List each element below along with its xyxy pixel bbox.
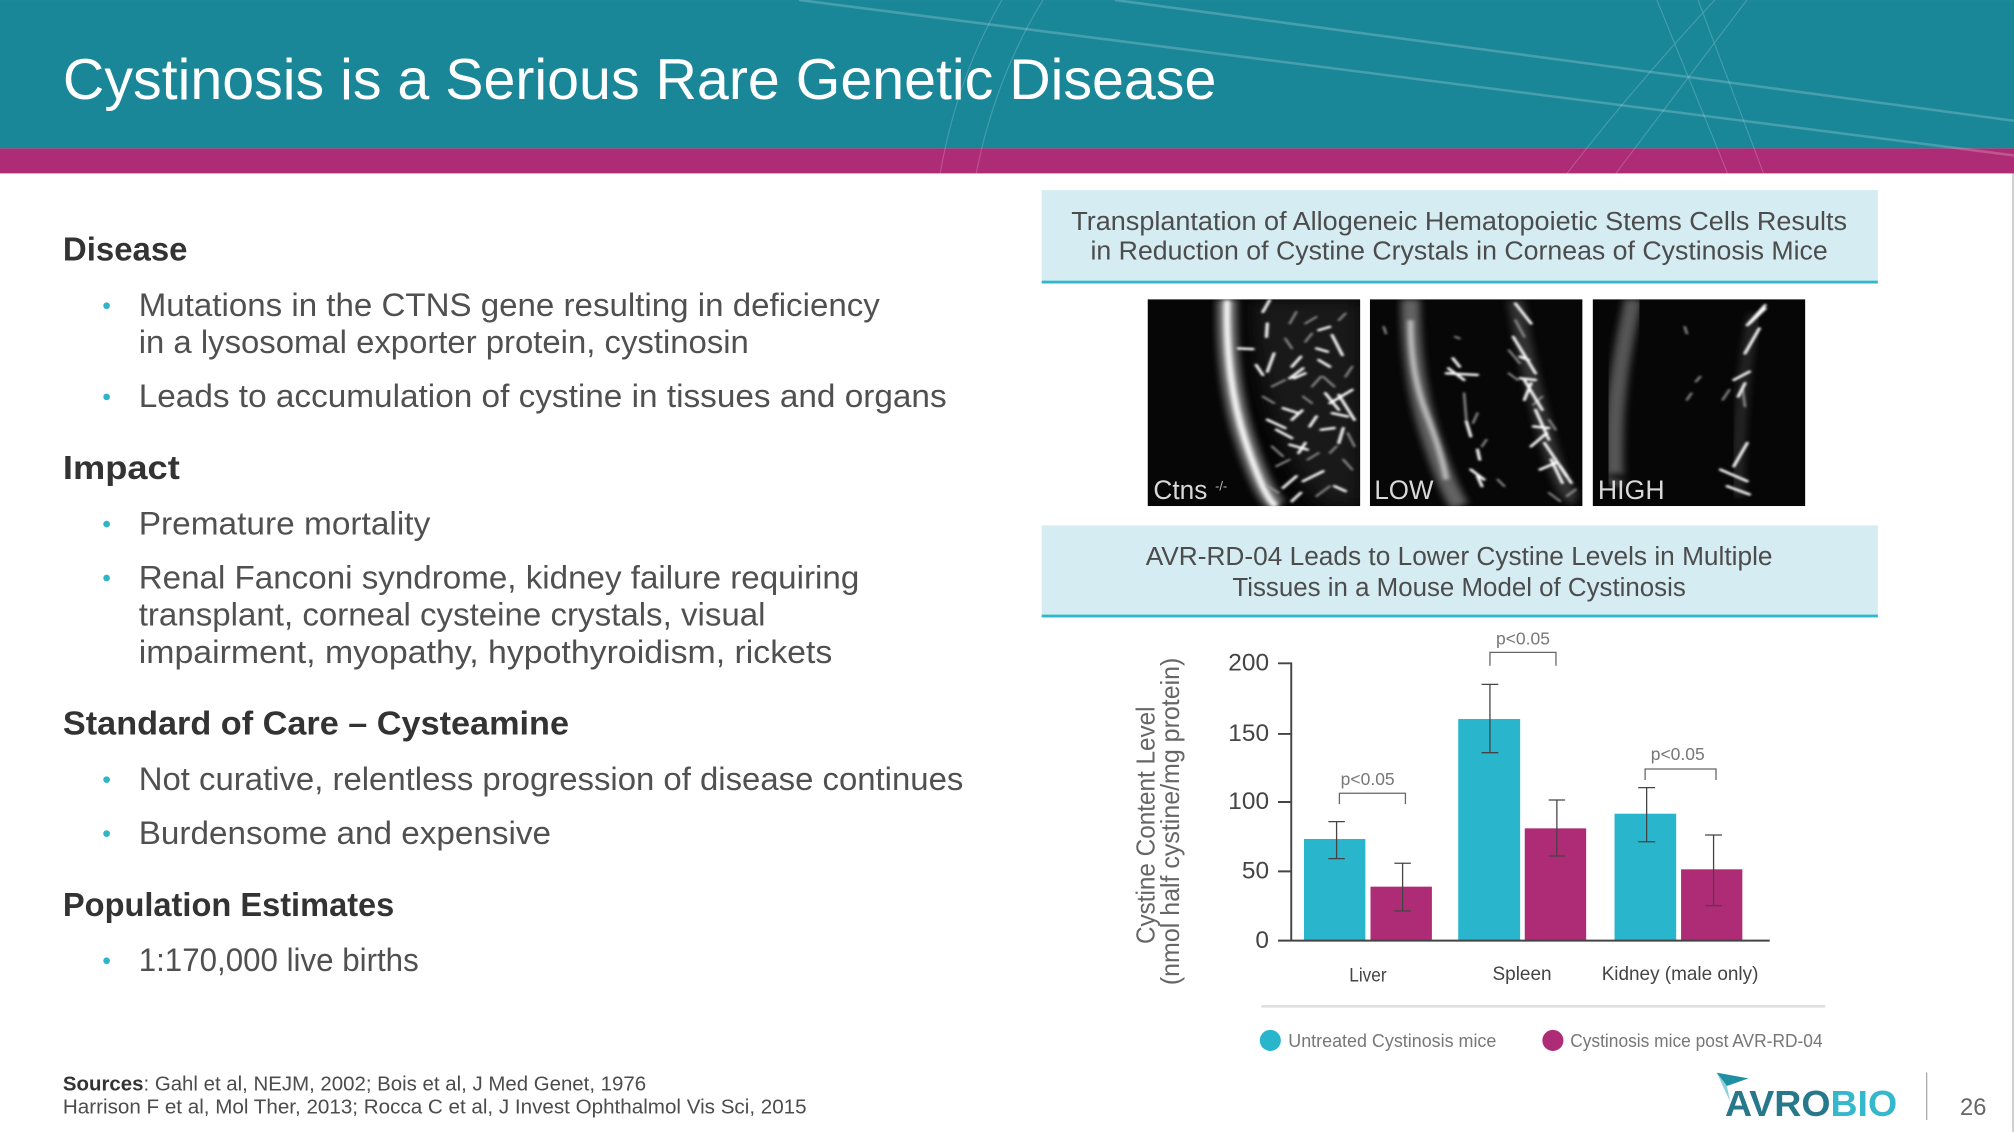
y-axis tick labels: 200 bbox=[1228, 649, 1269, 676]
y-axis tick labels: 0 bbox=[1255, 927, 1269, 954]
bullets: standard of care: Burdensome and expensive bbox=[139, 815, 551, 851]
heading: disease: Disease bbox=[63, 232, 188, 269]
y-axis tick labels: 150 bbox=[1228, 720, 1269, 747]
bullets: impact: transplant, corneal cysteine crystals, visual bbox=[139, 597, 766, 633]
y-axis title bbox=[1133, 658, 1185, 985]
header banner bbox=[0, 0, 2014, 173]
panel: left text column bbox=[63, 232, 963, 978]
panel: transplantation heading box bbox=[1042, 190, 1878, 283]
y-axis title: (nmol half cystine/mg protein) bbox=[1157, 658, 1185, 985]
y-axis tick labels: 100 bbox=[1228, 788, 1269, 815]
heading: population estimates: Population Estimates bbox=[63, 887, 394, 924]
category labels: Liver bbox=[1349, 965, 1387, 986]
category labels bbox=[1349, 964, 1758, 986]
category labels: Kidney (male only) bbox=[1602, 964, 1758, 985]
micrograph: LOW: LOW bbox=[1374, 475, 1434, 505]
sources: Harrison F et al, Mol Ther, 2013; Rocca C et al, J Invest Ophthalmol Vis Sci, 2015 bbox=[63, 1097, 807, 1119]
bullets: impact: Renal Fanconi syndrome, kidney failure requiring bbox=[139, 559, 859, 595]
micrograph: Ctns -/-: Ctns bbox=[1153, 475, 1207, 505]
category labels: Spleen bbox=[1493, 964, 1552, 985]
title: Cystinosis is a Serious Rare Genetic Disease bbox=[63, 48, 1216, 112]
panel: AVR-RD-04 heading box: Tissues in a Mouse Model of Cystinosis bbox=[1232, 572, 1686, 602]
legend bbox=[1260, 1005, 1825, 1051]
bullets: disease: in a lysosomal exporter protein, cystinosin bbox=[139, 324, 749, 360]
bullets: impact: impairment, myopathy, hypothyroidism, rickets bbox=[139, 634, 832, 670]
micrograph: HIGH bbox=[1593, 299, 1805, 506]
significance labels: p<0.05 bbox=[1496, 628, 1550, 648]
significance labels: p<0.05 bbox=[1341, 769, 1395, 789]
micrograph: Ctns -/- bbox=[1148, 299, 1361, 507]
micrograph: LOW bbox=[1370, 299, 1582, 506]
y-axis tick labels: 50 bbox=[1242, 858, 1269, 885]
micrograph: Ctns -/-: -/- bbox=[1215, 479, 1227, 494]
significance brackets bbox=[1339, 652, 1716, 804]
sources: Sources: Gahl et al, NEJM, 2002; Bois et al, J Med Genet, 1976 bbox=[63, 1074, 646, 1096]
bullets: standard of care bbox=[103, 761, 963, 851]
bars: Liver bbox=[1304, 839, 1432, 941]
panel: AVR-RD-04 heading box bbox=[1042, 525, 1878, 617]
bullets: disease: Leads to accumulation of cystine in tissues and organs bbox=[139, 378, 947, 414]
bullets: impact: Premature mortality bbox=[139, 505, 430, 541]
page number: 26 bbox=[1960, 1094, 1986, 1121]
y-axis title: Cystine Content Level bbox=[1133, 706, 1161, 944]
footer divider bbox=[1926, 1073, 1927, 1120]
y-axis tick labels bbox=[1228, 649, 1269, 954]
bars: Spleen bbox=[1458, 719, 1586, 941]
significance labels: p<0.05 bbox=[1651, 744, 1705, 764]
heading: standard of care: Standard of Care – Cysteamine bbox=[63, 706, 569, 743]
heading: impact: Impact bbox=[63, 450, 180, 487]
legend: Untreated Cystinosis mice bbox=[1288, 1030, 1496, 1051]
bullets: population estimates: 1:170,000 live births bbox=[139, 942, 419, 978]
axes bbox=[1278, 663, 1770, 941]
bullets: disease: Mutations in the CTNS gene resulting in deficiency bbox=[139, 287, 880, 323]
bullets: impact bbox=[103, 505, 859, 670]
panel: AVR-RD-04 heading box: AVR-RD-04 Leads to Lower Cystine Levels in Multiple bbox=[1146, 541, 1773, 571]
bullets: standard of care: Not curative, relentless progression of disease continues bbox=[139, 761, 963, 797]
bar chart bbox=[1133, 628, 1770, 986]
error bars bbox=[1328, 684, 1722, 911]
significance labels bbox=[1341, 628, 1705, 789]
micrograph: HIGH: HIGH bbox=[1598, 475, 1665, 505]
legend: Cystinosis mice post AVR-RD-04 bbox=[1570, 1030, 1823, 1051]
panel: transplantation heading box: Transplantation of Allogeneic Hematopoietic Stems Cells Results bbox=[1071, 206, 1847, 236]
sources bbox=[63, 1074, 807, 1119]
bars: Kidney bbox=[1615, 814, 1742, 941]
panel: transplantation heading box: in Reduction of Cystine Crystals in Corneas of Cystinosis Mice bbox=[1090, 235, 1828, 265]
bullets: disease bbox=[103, 287, 947, 414]
logo: AVROBIO: AVROBIO bbox=[1725, 1083, 1897, 1124]
